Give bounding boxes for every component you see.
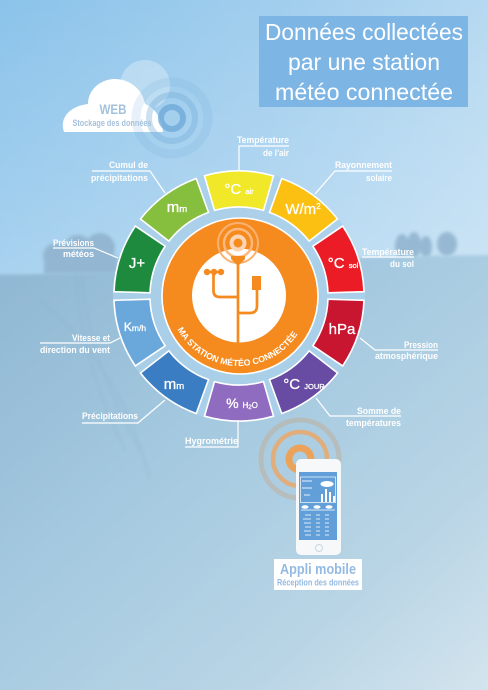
label: forecasts [53, 237, 118, 259]
label: soil temperature [362, 246, 414, 269]
label: sum of temperatures: températures [346, 417, 401, 428]
label: air temperature [237, 134, 289, 171]
label: air temperature: Température [237, 134, 289, 145]
segment units: 2 [316, 202, 321, 211]
label: cumulative precipitation: précipitations [91, 172, 148, 183]
app label [274, 559, 362, 590]
segment units: Km/h [124, 320, 146, 334]
label: atmospheric pressure: atmosphérique [375, 350, 438, 361]
segments [109, 171, 369, 421]
segment: hygrometry [204, 382, 274, 421]
segment units: J+ [129, 255, 145, 272]
label: solar radiation: Rayonnement [335, 159, 392, 170]
label: cumulative precipitation [91, 159, 165, 193]
central station disc [161, 217, 319, 375]
segment: wind [109, 290, 168, 367]
label: wind: Vitesse et [72, 332, 110, 343]
label: cumulative precipitation: Cumul de [109, 159, 148, 170]
label: soil temperature: du sol [390, 258, 414, 269]
icon: back cloud [120, 60, 170, 110]
label: wind: direction du vent [40, 344, 110, 355]
segment: precipitation [138, 345, 217, 417]
segment units: W/m [285, 201, 316, 218]
segment units: O [252, 401, 258, 410]
curved station name: MA STATION MÉTÉO CONNECTÉE [178, 326, 298, 366]
segment units: °C air [224, 181, 254, 198]
segment: pressure [310, 290, 369, 367]
label: air temperature: de l'air [263, 147, 289, 158]
label: hygrometry [185, 420, 238, 447]
label: sum of temperatures: Somme de [357, 405, 401, 416]
title box: par une station [288, 49, 440, 75]
icon: front cloud [63, 79, 163, 132]
title box: météo connectée [275, 79, 453, 105]
label: atmospheric pressure: Pression [404, 339, 438, 350]
web cloud storage [63, 60, 208, 154]
segment units: mm [164, 376, 184, 393]
label: forecasts: Prévisions [53, 237, 94, 248]
app label: Appli mobile [280, 561, 356, 578]
app label: Réception des données [277, 578, 359, 588]
mobile app [261, 420, 362, 590]
label: soil temperature: Température [362, 246, 414, 257]
segment: cumulative rainfall [138, 175, 217, 247]
label: forecasts: météos [63, 248, 94, 259]
segment: solar radiation [261, 175, 340, 247]
segment: forecasts [109, 225, 168, 302]
segment units: % H [226, 395, 248, 411]
label: sum of temperatures [316, 398, 401, 428]
segment: soil temperature [310, 225, 369, 302]
web label [72, 101, 152, 128]
web label: Stockage des données [72, 118, 152, 128]
segment units [124, 181, 359, 411]
segment units: mm [167, 199, 187, 216]
web label: WEB [100, 101, 126, 117]
ring backing [113, 170, 365, 422]
label: wind [40, 332, 120, 355]
segment units: 2 [248, 405, 252, 411]
label: atmospheric pressure [360, 338, 438, 361]
segment units: hPa [329, 321, 356, 338]
icon: station signal [218, 223, 258, 263]
orange disc [162, 218, 318, 374]
label: precipitation [82, 400, 165, 423]
icon: phone signal rings [261, 420, 339, 498]
icon: weather station sensors [204, 256, 261, 343]
label: solar radiation: solaire [366, 172, 392, 183]
segment units: °C sol [328, 255, 359, 272]
title box: Données collectées [265, 19, 463, 45]
segment: air temperature [204, 171, 274, 210]
segment: degree days [261, 345, 340, 417]
icon: phone [296, 459, 341, 555]
title box [259, 16, 468, 107]
label: solar radiation [315, 159, 392, 194]
label: hygrometry: Hygrométrie [185, 435, 238, 446]
data ring [109, 170, 369, 422]
white inner circle [192, 248, 286, 342]
icon: signal rings [136, 82, 208, 154]
segment units: °C JOUR [283, 376, 325, 393]
label: precipitation: Précipitations [82, 410, 138, 421]
